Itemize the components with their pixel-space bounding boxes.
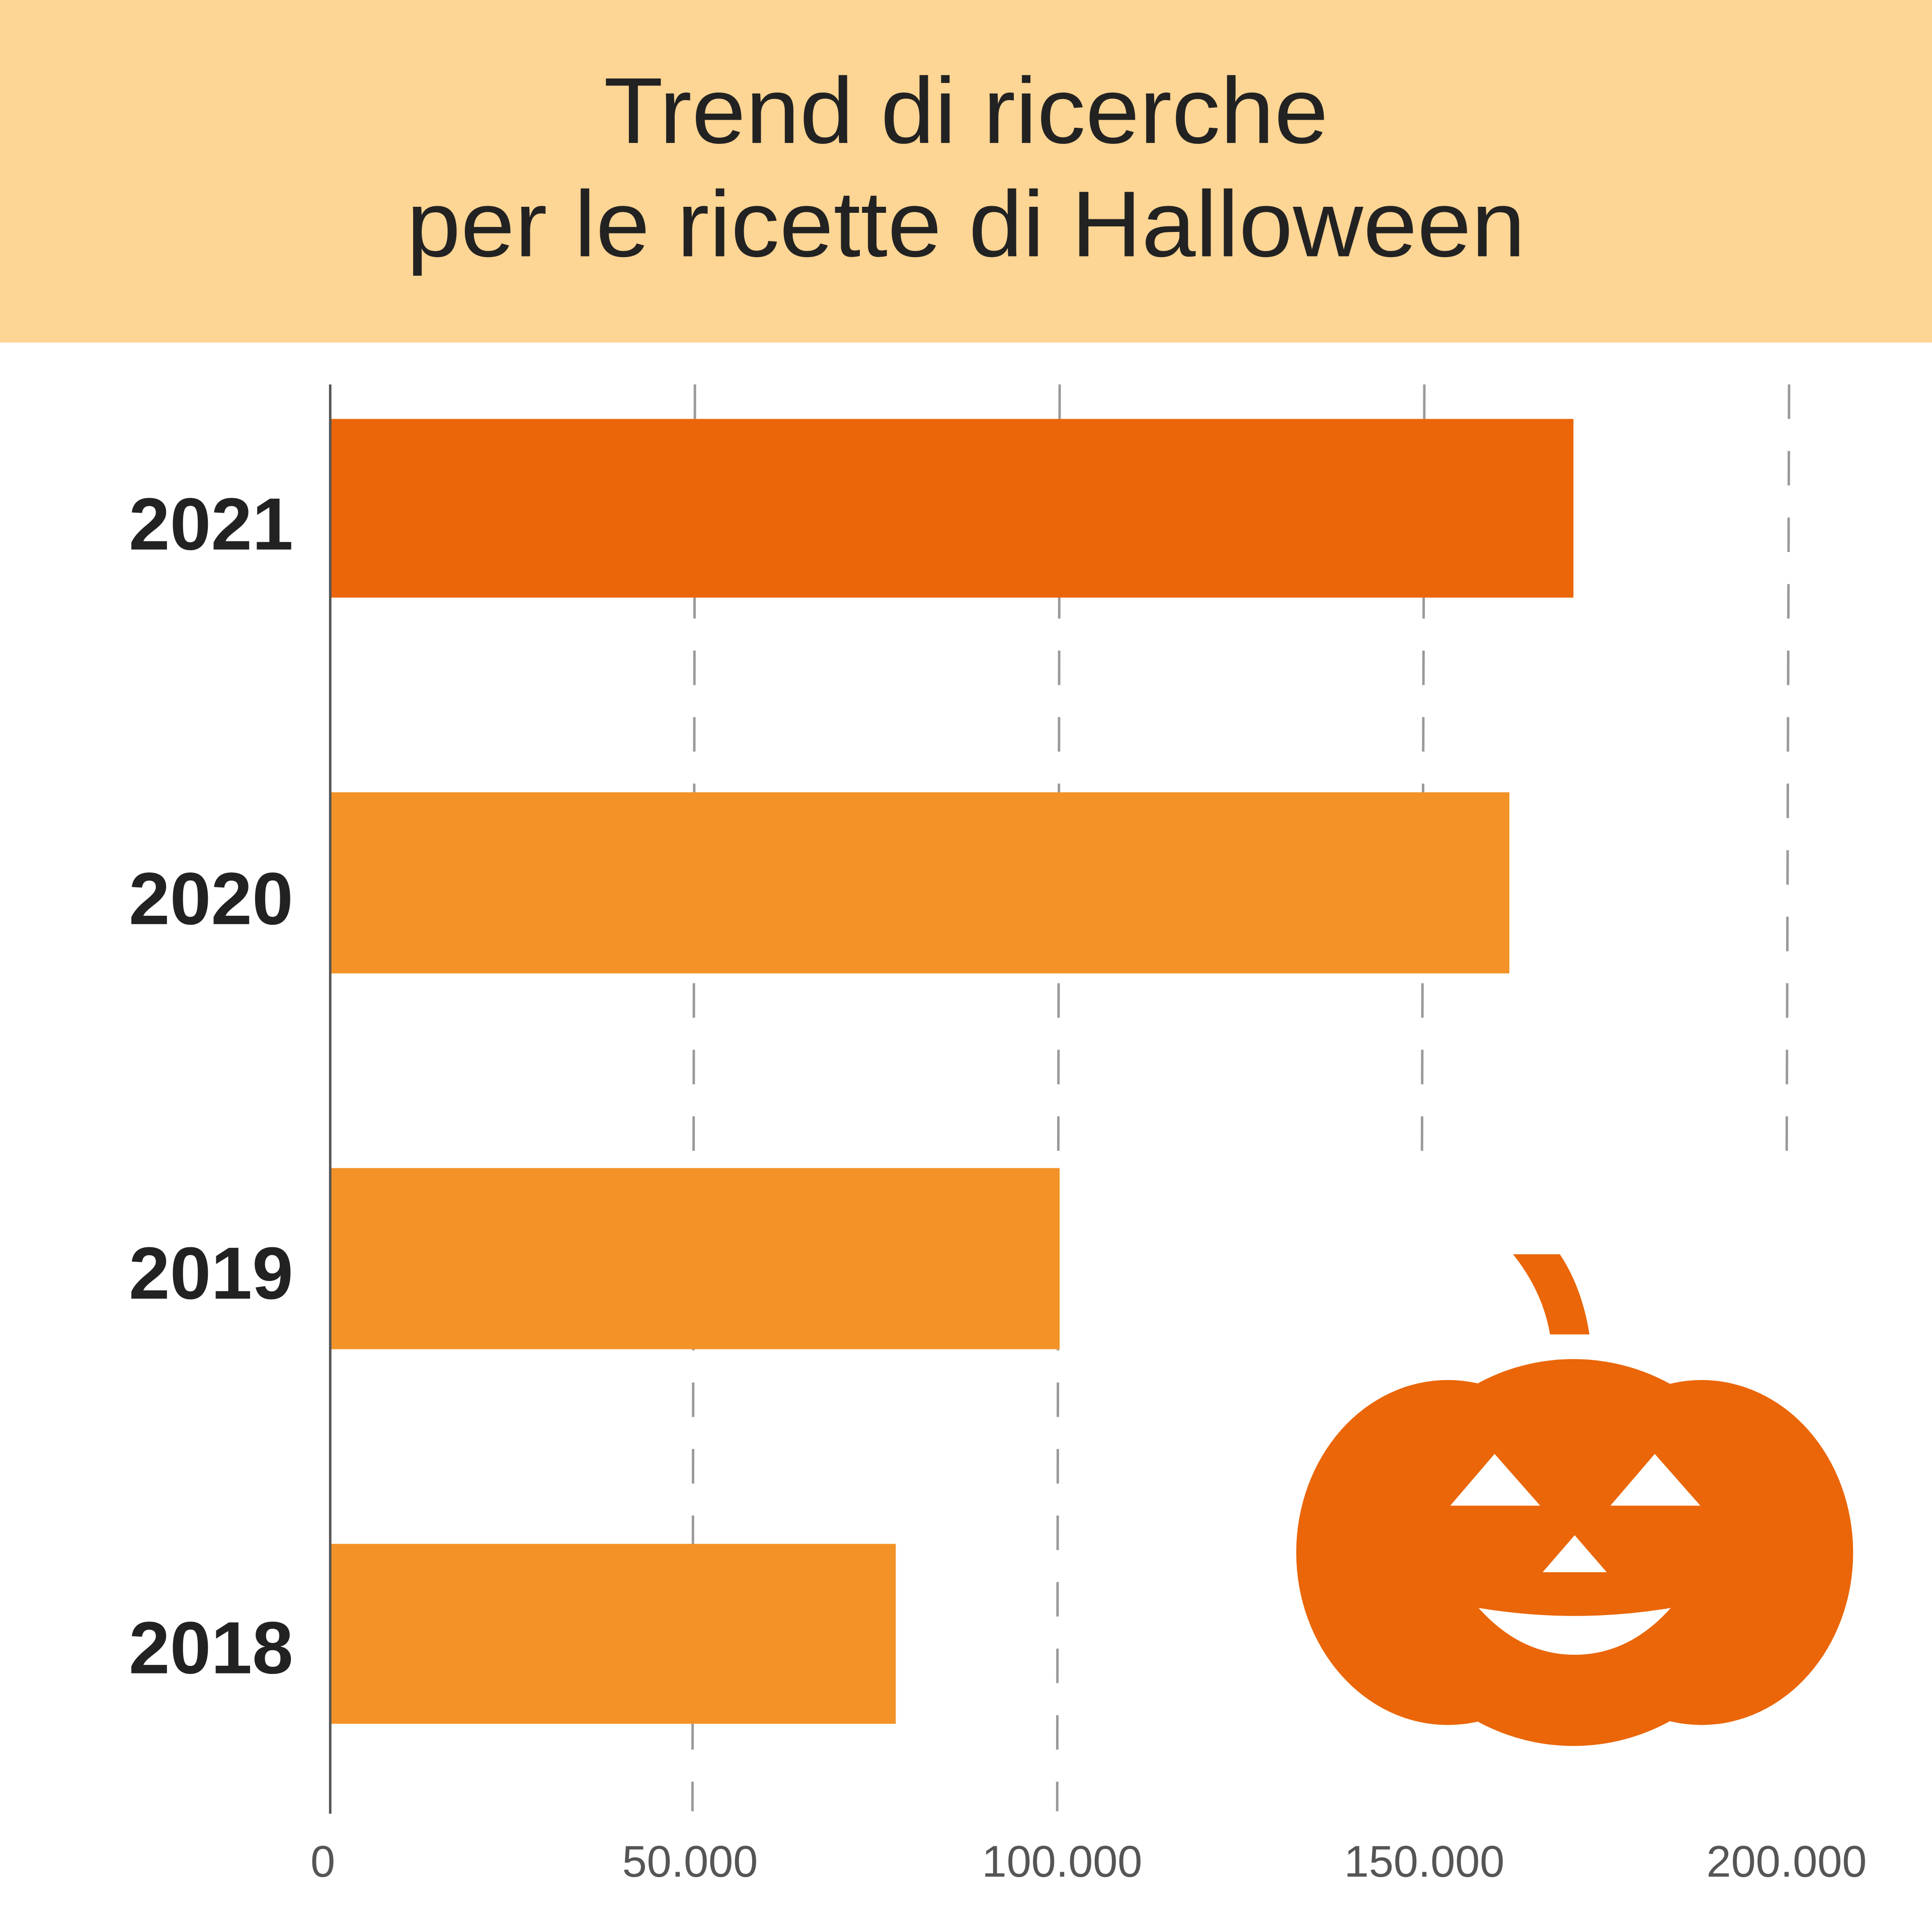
- x axis labels: 100.000: [982, 1836, 1142, 1886]
- year labels: 2020: [129, 858, 293, 940]
- x axis labels: 200.000: [1707, 1836, 1867, 1886]
- icon: pumpkin: [1296, 1254, 1853, 1746]
- x axis labels: 50.000: [622, 1836, 758, 1886]
- gridlines: [692, 384, 1789, 1811]
- bar chart: [330, 419, 1573, 1724]
- x axis labels: [310, 1836, 1867, 1886]
- x axis labels: 0: [310, 1836, 335, 1886]
- title: per le ricette di Halloween: [407, 172, 1525, 276]
- x axis labels: 150.000: [1344, 1836, 1504, 1886]
- y axis: [330, 384, 331, 1814]
- header band: [0, 0, 1932, 343]
- year labels: 2021: [129, 483, 293, 566]
- title: Trend di ricerche: [604, 59, 1328, 163]
- year labels: [129, 483, 293, 1689]
- year labels: 2019: [129, 1232, 293, 1315]
- title: [407, 59, 1525, 276]
- year labels: 2018: [129, 1607, 293, 1689]
